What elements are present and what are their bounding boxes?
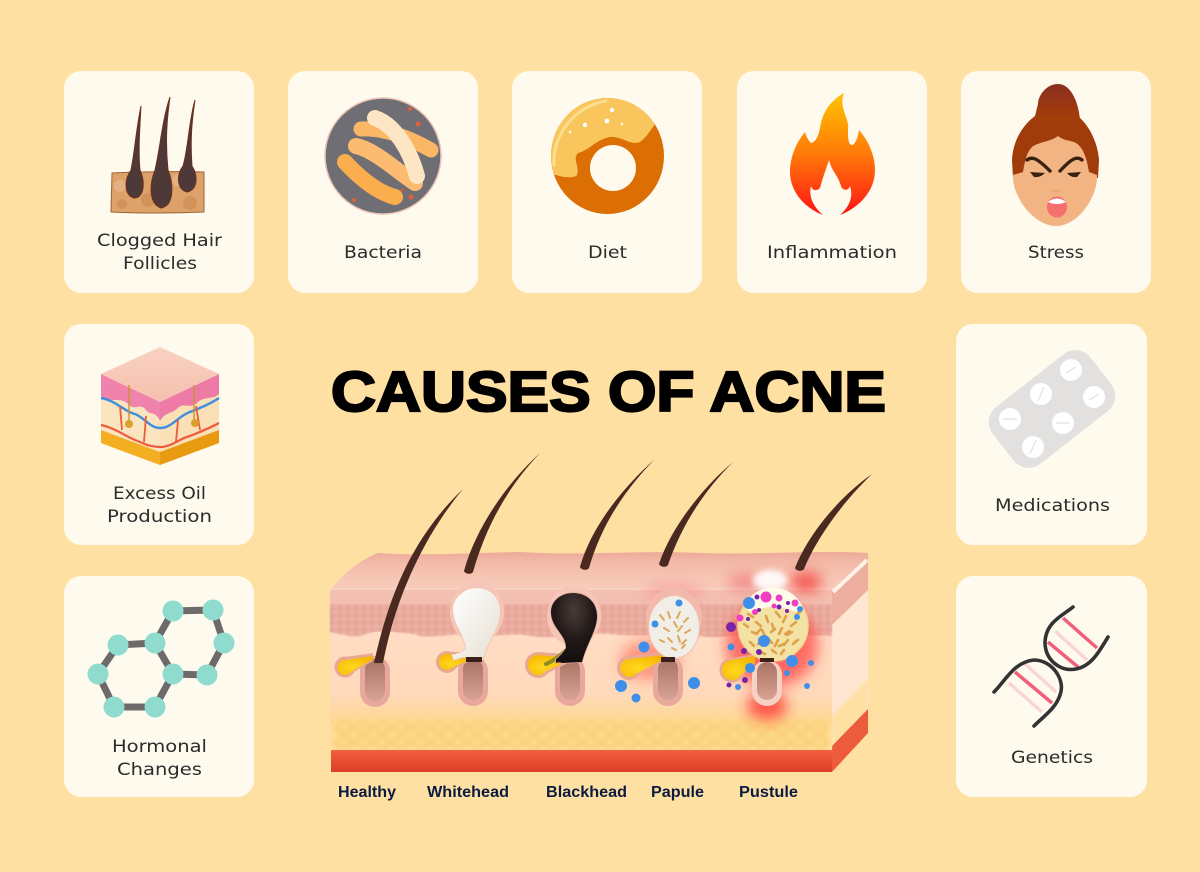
icon: stressed face [1012,84,1099,226]
diagram labels: Whitehead [427,784,509,801]
label: bacteria: Bacteria [344,243,422,263]
panel: genetics [956,576,1147,797]
mottled skin band [330,604,832,637]
panel: bacteria [288,71,478,293]
panel: inflammation [737,71,927,293]
panel: diet [512,71,702,293]
fat layer [333,720,830,750]
panel: excess oil production [64,324,254,545]
follicle domes [450,581,702,648]
diagram labels: Healthy [338,784,396,801]
muscle layer [331,750,832,772]
skin surface [330,552,868,592]
icon: flame [790,93,875,215]
label: inflammation: Inflammation [767,243,897,263]
pustule [738,588,808,661]
icon: bacteria [325,98,441,214]
icon: hair follicles [111,97,204,213]
dermis layer [330,632,832,724]
icon: DNA helix [994,607,1108,726]
skin side face [832,555,868,772]
inflammation glow [620,572,822,720]
papule [649,596,699,658]
label: stress: Stress [1028,243,1084,263]
label: genetics: Genetics [1011,748,1093,768]
follicle bases [360,656,782,707]
gland halos [334,651,755,682]
diagram labels: Papule [651,784,704,801]
magenta dots [736,592,798,622]
title: CAUSES OF ACNE [331,360,886,423]
blackhead [546,593,597,664]
hair roots [466,657,774,662]
label: hormonal changes: Hormonal [112,737,207,757]
blue bacteria dots [615,597,814,702]
panel: stress [961,71,1151,293]
icon: molecule [88,600,234,718]
diagram labels: Pustule [739,784,798,801]
label: clogged hair follicles: Clogged Hair [97,231,222,251]
diagram labels [338,784,798,801]
panel: hormonal changes [64,576,254,797]
hair shafts [374,453,872,663]
label: excess oil production: Production [107,507,212,527]
diagram labels: Blackhead [546,784,627,801]
infographic canvas [64,71,1151,800]
icon: blister pack [981,342,1123,476]
icon: skin cube [101,347,219,465]
panel: clogged hair follicles [64,71,254,293]
icon: donut [551,98,664,214]
sebaceous glands [338,654,755,680]
label: medications: Medications [995,496,1110,516]
label: hormonal changes: Changes [117,760,202,780]
panel: medications [956,324,1147,545]
pustule surface highlight [753,570,787,590]
label: clogged hair follicles: Follicles [123,254,197,274]
label: diet: Diet [588,243,627,263]
whitehead [452,588,500,660]
skin cross-section diagram [330,453,872,801]
purple dots [726,594,790,688]
label: excess oil production: Excess Oil [113,484,206,504]
epidermis layer [330,590,832,638]
